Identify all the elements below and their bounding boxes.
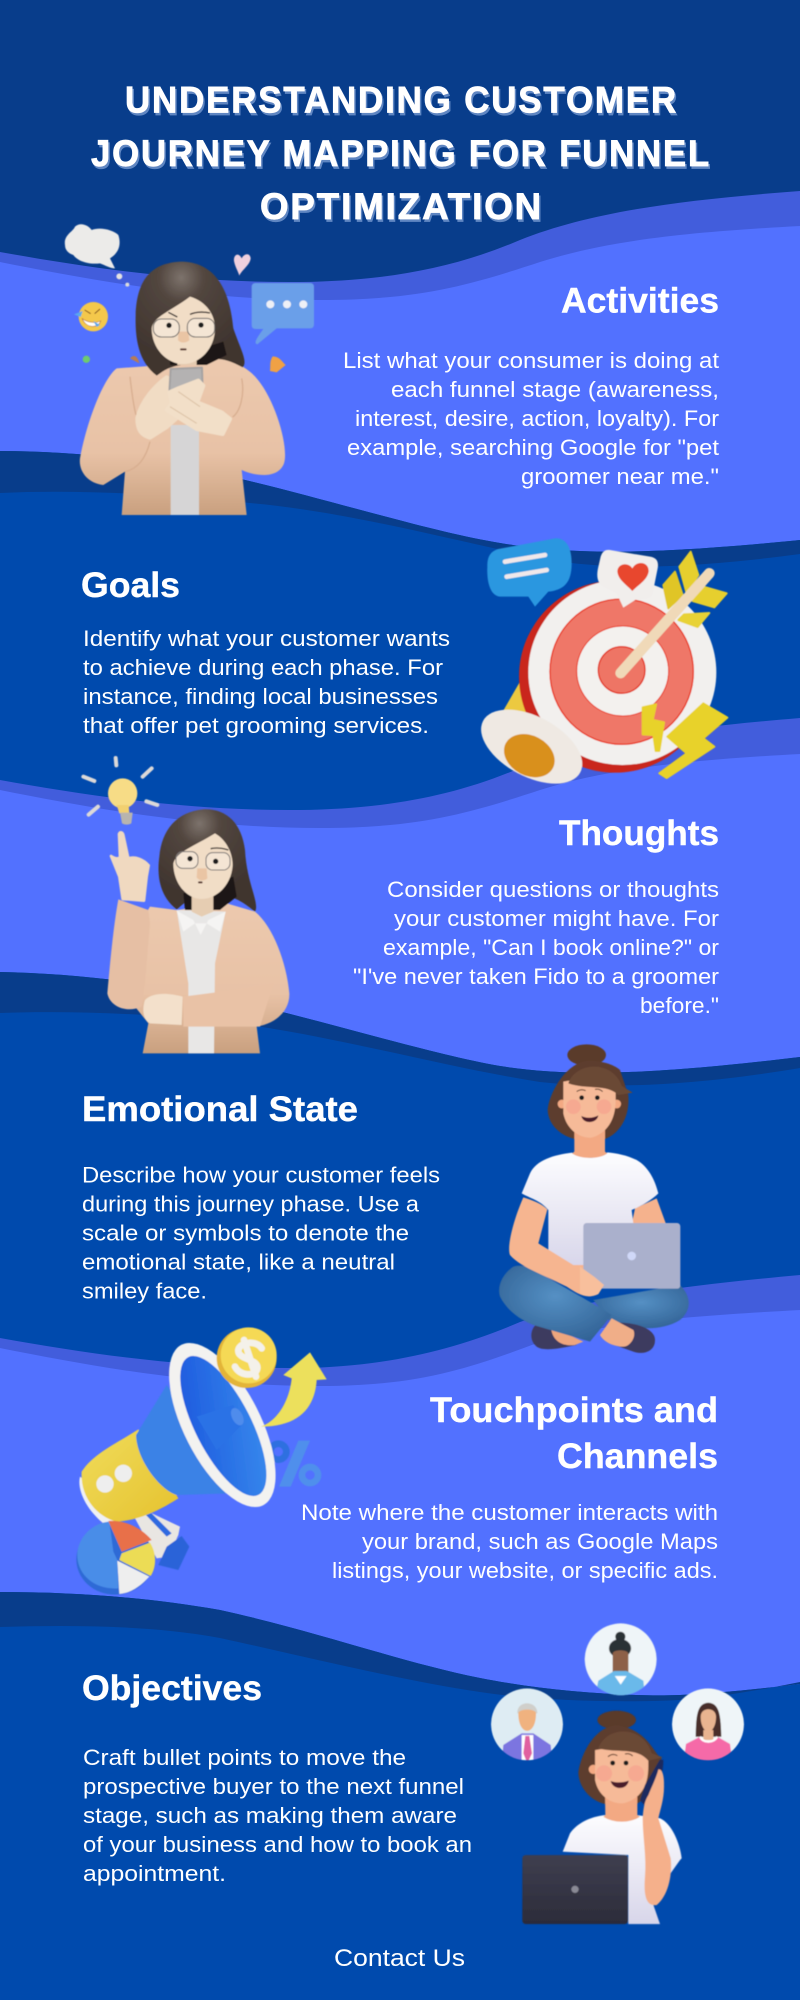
icon: laughing emoji	[74, 302, 108, 331]
text block: thoughts	[353, 877, 720, 1018]
icon: thought cloud	[65, 224, 129, 287]
panel: activities	[343, 282, 720, 489]
text block: touchpoints and channels: your brand, such as Google Maps	[362, 1529, 718, 1554]
icon: avatar man	[491, 1688, 563, 1763]
text block: emotional state: smiley face.	[82, 1278, 207, 1304]
icon: woman pointing at light bulb	[83, 758, 289, 1053]
icon: heart bubble	[597, 550, 658, 608]
icon: yellow up arrow	[261, 1352, 327, 1427]
text block: activities: each funnel stage (awareness,	[391, 377, 719, 402]
text block: thoughts: before."	[640, 993, 719, 1018]
text block: thoughts: Consider questions or thoughts	[387, 877, 719, 902]
figure: woman torso and arm	[563, 1815, 682, 1924]
figure: woman body	[80, 356, 285, 515]
icon: pink heart	[234, 254, 251, 276]
text block: goals	[83, 626, 450, 738]
heading: touchpoints and channels	[430, 1391, 718, 1476]
figure: woman head	[136, 262, 245, 376]
text block: emotional state: during this journey phase. Use a	[82, 1192, 419, 1216]
text block: goals: to achieve during each phase. For	[83, 655, 444, 680]
text block: activities: groomer near me."	[521, 464, 719, 489]
text block: thoughts: your customer might have. For	[394, 906, 720, 931]
text block: emotional state: Describe how your customer feels	[82, 1162, 440, 1188]
icon: blue chat bubble	[487, 538, 572, 607]
text block: objectives: of your business and how to book an	[83, 1832, 472, 1857]
title: UNDERSTANDING CUSTOMER	[125, 80, 678, 120]
heading: touchpoints and channels: Touchpoints and	[430, 1391, 718, 1430]
icon: dollar coin	[217, 1327, 277, 1388]
icon: bell	[270, 356, 286, 372]
text block: emotional state	[82, 1162, 440, 1304]
icon: woman looking at phone with floating reactions	[65, 224, 314, 515]
text block: touchpoints and channels: listings, your website, or specific ads.	[332, 1558, 718, 1583]
panel: thoughts	[353, 814, 720, 1018]
icon: megaphone with coin, arrow, percent and pie chart	[76, 1327, 327, 1595]
heading: goals: Goals	[81, 566, 180, 605]
icon: arrow	[621, 552, 727, 673]
icon: phone	[640, 1759, 663, 1810]
icon: horn cone behind target	[502, 682, 580, 767]
figure: woman body	[107, 832, 289, 1053]
icon: megaphone	[79, 1327, 297, 1570]
icon: lightning bolts	[643, 703, 727, 778]
title: OPTIMIZATION	[260, 186, 543, 227]
text block: objectives: appointment.	[83, 1861, 226, 1886]
icon: dark laptop	[522, 1855, 628, 1924]
title: JOURNEY MAPPING FOR FUNNEL	[91, 133, 711, 174]
icon: horn rim and opening	[469, 694, 594, 799]
figure: woman head	[578, 1711, 663, 1822]
text block: thoughts: "I've never taken Fido to a groomer	[353, 964, 720, 989]
icon: target	[519, 580, 716, 773]
figure: woman sitting with laptop	[499, 1044, 689, 1353]
text block: goals: that offer pet grooming services.	[83, 713, 429, 738]
panel: touchpoints and channels	[301, 1391, 718, 1583]
text block: touchpoints and channels	[301, 1500, 718, 1583]
icon: avatar woman pink	[672, 1688, 744, 1763]
pie chart	[76, 1521, 155, 1595]
text block: objectives: prospective buyer to the next funnel	[83, 1774, 464, 1799]
text block: thoughts: example, "Can I book online?" or	[383, 935, 720, 960]
figure: torso and arms	[509, 1152, 666, 1296]
text block: emotional state: emotional state, like a neutral	[82, 1250, 395, 1274]
text block: activities: example, searching Google for "pet	[347, 435, 720, 460]
figure: head	[548, 1044, 633, 1158]
text block: objectives: stage, such as making them aware	[83, 1803, 457, 1828]
text block: objectives: Craft bullet points to move the	[83, 1745, 406, 1770]
heading: activities: Activities	[561, 282, 719, 320]
icon: green dot	[83, 356, 90, 363]
icon: percent sign	[270, 1441, 318, 1487]
text block: goals: Identify what your customer wants	[83, 626, 450, 651]
text block: activities: List what your consumer is doing at	[343, 348, 720, 373]
text block: emotional state: scale or symbols to denote the	[82, 1220, 409, 1246]
panel: goals	[81, 566, 450, 738]
icon: avatar woman blue	[585, 1623, 657, 1697]
heading: touchpoints and channels: Channels	[557, 1437, 718, 1476]
panel: emotional state	[82, 1090, 440, 1304]
text block: activities: interest, desire, action, loyalty). For	[355, 406, 720, 431]
figure: arm holding phone	[643, 1769, 671, 1905]
figure: legs and shoes	[499, 1266, 689, 1353]
text block: objectives	[83, 1745, 472, 1886]
icon: target with arrow, megaphone and lightning	[469, 538, 727, 799]
figure: woman head	[159, 809, 256, 917]
heading: emotional state: Emotional State	[82, 1090, 358, 1129]
icon: light bulb	[83, 758, 157, 825]
text block: activities	[343, 348, 720, 489]
title	[91, 80, 711, 227]
icon: speech bubble	[252, 283, 314, 344]
figure: woman on phone with customer avatars	[491, 1623, 744, 1924]
heading: thoughts: Thoughts	[559, 814, 719, 853]
panel: objectives	[82, 1669, 472, 1886]
icon: laptop	[580, 1223, 680, 1296]
text block: goals: instance, finding local businesses	[83, 684, 438, 709]
footer: contact us: Contact Us	[334, 1945, 465, 1972]
heading: objectives: Objectives	[82, 1669, 262, 1708]
text block: touchpoints and channels: Note where the customer interacts with	[301, 1500, 718, 1525]
